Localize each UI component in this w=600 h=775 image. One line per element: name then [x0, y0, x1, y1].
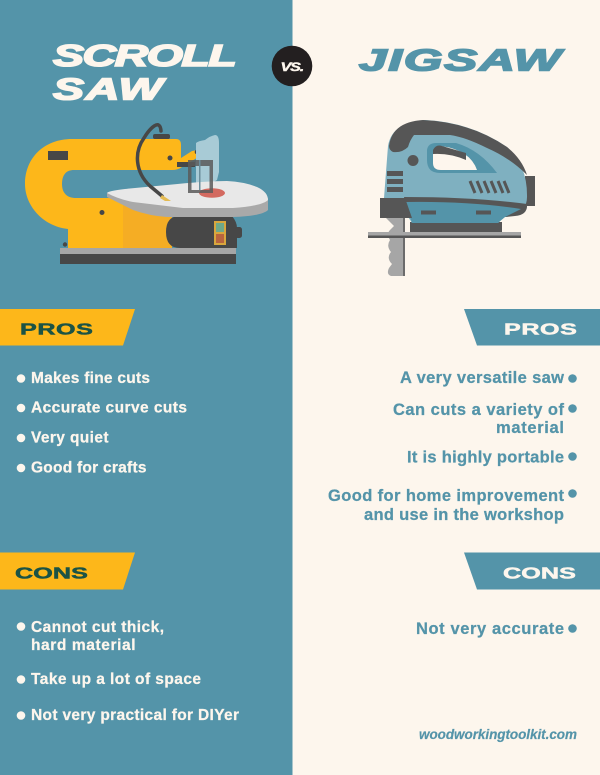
banner: jigsaw pros: PROS	[504, 321, 577, 338]
table top	[107, 181, 268, 208]
list: jigsaw pros: It is highly portable	[407, 448, 564, 466]
badge: vs: VS.	[280, 60, 304, 73]
list: scroll saw cons: hard material	[31, 637, 136, 654]
body	[384, 120, 527, 223]
shoe	[410, 222, 502, 233]
banner: scroll saw cons	[0, 552, 135, 590]
side vents	[470, 181, 509, 193]
title: scroll saw: SCROLL	[53, 39, 237, 73]
lower body	[404, 198, 525, 223]
motor switch	[214, 221, 226, 245]
red table disc	[199, 188, 225, 198]
trigger	[433, 146, 466, 160]
body pins	[63, 150, 199, 247]
motor knob	[235, 227, 242, 238]
darker body panel	[123, 205, 172, 248]
lower body trim	[404, 197, 527, 217]
hose	[137, 125, 162, 196]
blade	[386, 218, 405, 276]
list: scroll saw cons	[17, 619, 239, 724]
list: jigsaw pros	[328, 369, 577, 524]
guard glass back	[196, 135, 219, 184]
yellow body	[25, 139, 200, 248]
banner: jigsaw pros	[464, 309, 600, 346]
title: scroll saw	[53, 39, 237, 107]
blade holder	[177, 160, 213, 193]
front vents	[387, 171, 403, 192]
list: scroll saw cons: Cannot cut thick,	[31, 619, 164, 636]
banner: jigsaw cons	[464, 552, 600, 590]
source url: woodworkingtoolkit.com	[419, 727, 577, 742]
badge: vs	[272, 46, 312, 86]
list: jigsaw cons: Not very accurate	[416, 620, 564, 638]
panel: jigsaw background	[292, 0, 600, 775]
banner: scroll saw cons: CONS	[15, 565, 88, 582]
list: scroll saw cons: Not very practical for DIYer	[31, 707, 239, 724]
banner: scroll saw pros	[0, 309, 135, 346]
top grip	[389, 120, 527, 175]
list: scroll saw pros: Accurate curve cuts	[31, 400, 187, 416]
list: jigsaw pros: and use in the workshop	[364, 506, 564, 524]
motor	[166, 216, 237, 248]
banner: jigsaw cons: CONS	[503, 565, 576, 582]
list: jigsaw pros: Can cuts a variety of	[393, 401, 564, 419]
title: jigsaw: JIGSAW	[359, 43, 564, 77]
list: scroll saw pros: Makes fine cuts	[31, 370, 150, 387]
body label	[48, 151, 68, 160]
base	[60, 248, 236, 254]
list: jigsaw pros: Good for home improvement	[328, 487, 564, 505]
title: scroll saw: SAW	[53, 72, 167, 107]
list: scroll saw cons: Take up a lot of space	[31, 671, 201, 688]
list: scroll saw pros	[17, 370, 187, 477]
list: jigsaw pros: material	[496, 419, 564, 437]
lower slots	[421, 210, 436, 214]
table edge	[107, 193, 268, 217]
handle recess	[427, 143, 497, 173]
list: jigsaw pros: A very versatile saw	[400, 369, 564, 387]
front block	[380, 198, 412, 218]
illustration: jigsaw	[368, 120, 535, 276]
banner: scroll saw pros: PROS	[20, 321, 93, 338]
rear cap	[525, 176, 535, 206]
handle opening	[433, 146, 477, 170]
button	[408, 155, 418, 166]
hose mount	[153, 134, 170, 139]
hose nozzle	[160, 195, 171, 201]
list: scroll saw pros: Very quiet	[31, 430, 108, 446]
panel: scroll saw background	[0, 0, 292, 775]
illustration: scroll saw	[25, 125, 268, 264]
list: scroll saw pros: Good for crafts	[31, 460, 146, 477]
